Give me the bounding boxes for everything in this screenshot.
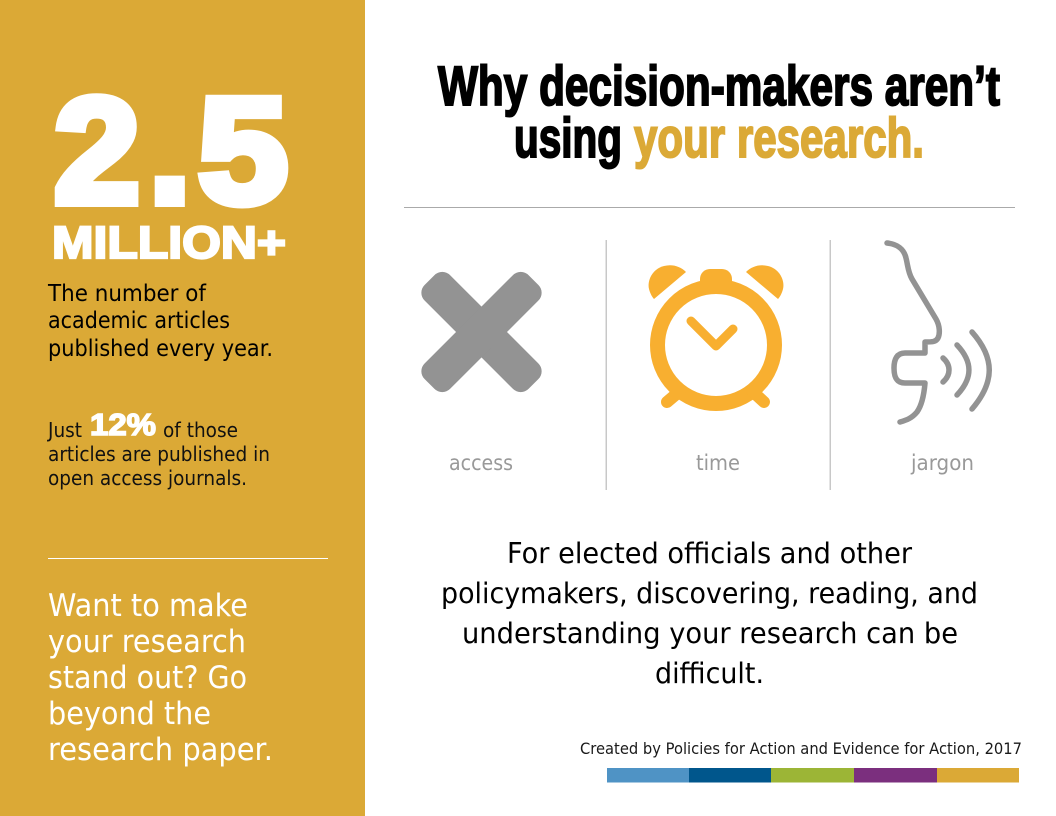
text block: policymakers explanation: difficult. (655, 657, 764, 690)
text block: call to action: stand out? Go (48, 660, 247, 696)
big number: 2.5: 5 (198, 66, 288, 234)
title: your research. (634, 106, 924, 169)
credit line: Created by Policies for Action and Evidence for Action, 2017 (580, 739, 1022, 758)
text block: call to action: Want to make (48, 588, 248, 624)
text block: number of articles (47, 281, 273, 362)
panel: time barrier (649, 265, 783, 475)
big number unit: MILLION+: MILLION+ (52, 217, 286, 268)
text block: 12% open access (46, 407, 270, 490)
color bar (607, 768, 1019, 782)
text block: number of articles: published every year. (48, 336, 273, 362)
text block: call to action (48, 588, 273, 768)
icon: speaking face profile (887, 243, 989, 422)
big number: 2.5: 2 (54, 66, 140, 234)
panel: access barrier (417, 267, 546, 475)
label: jargon: jargon (910, 451, 974, 475)
icon: orange alarm clock (649, 265, 783, 404)
text block: number of articles: The number of (47, 281, 207, 307)
text block: 12% open access: Just (46, 418, 82, 442)
label: time: time (696, 451, 740, 475)
big number: 2.5: . (149, 66, 191, 234)
text block: policymakers explanation (441, 537, 978, 690)
text block: policymakers explanation: understanding your research can be (462, 617, 958, 650)
panel: left statistics sidebar (0, 0, 365, 816)
text block: 12% open access: open access journals. (48, 466, 247, 490)
text block: call to action: your research (48, 624, 246, 660)
title: using (514, 106, 622, 169)
text block: call to action: research paper. (48, 732, 273, 768)
text block: policymakers explanation: For elected officials and other (507, 537, 912, 570)
big number: 2.5 (54, 66, 288, 234)
icon: gray X (417, 267, 546, 397)
label: access: access (449, 451, 513, 475)
panel: jargon barrier (887, 243, 989, 475)
text block: policymakers explanation: policymakers, discovering, reading, and (441, 577, 978, 610)
text block: 12% open access: 12% (90, 407, 156, 442)
text block: 12% open access: articles are published in (48, 442, 270, 466)
text block: call to action: beyond the (48, 696, 211, 732)
title (438, 54, 1000, 169)
text block: number of articles: academic articles (48, 308, 230, 334)
text block: 12% open access: of those (163, 418, 238, 442)
